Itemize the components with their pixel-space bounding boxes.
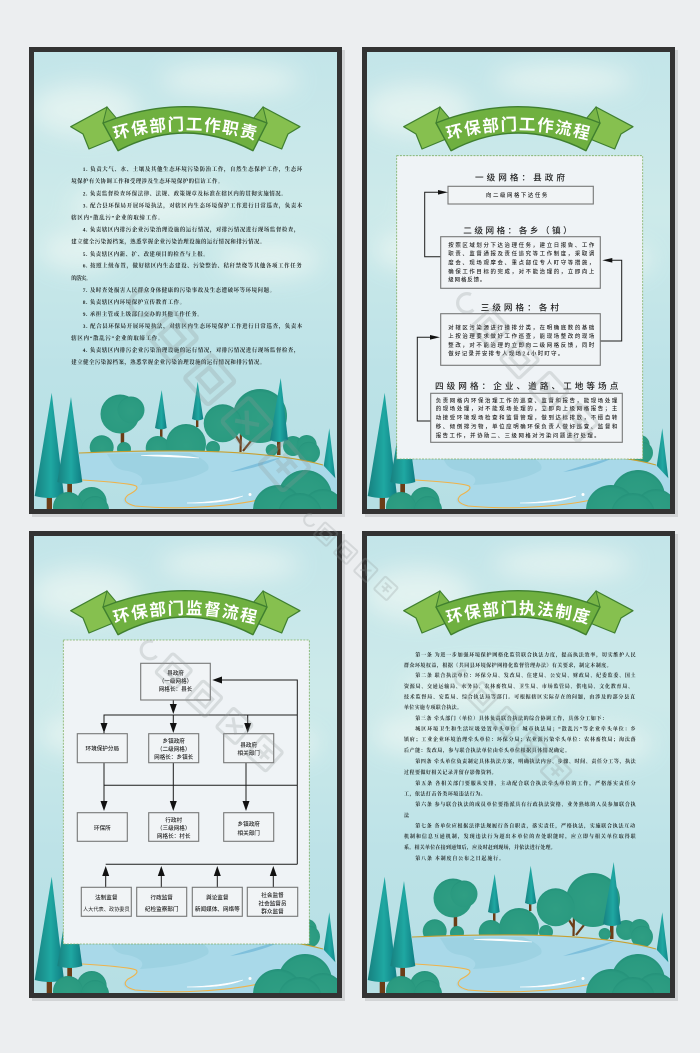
text block: duties list: 辖区内“散乱污”企业的取缔工作。	[71, 214, 163, 222]
banner: supervision process title	[70, 590, 301, 636]
box: public opinion supervision	[192, 887, 242, 916]
poster: enforcement rules	[362, 531, 675, 998]
poster: work process	[362, 47, 675, 514]
box: county departments	[224, 734, 274, 763]
box: level one task: 向二级网格下达任务	[486, 191, 548, 199]
box: level two duties: 按照区域划分下达治理任务，建立日报告、工作	[448, 241, 595, 249]
box: environmental office	[77, 813, 127, 841]
box: level four duties: 动接受环境现场检查和监督管理，做到达标排放，不擅自转	[436, 414, 618, 422]
box: public opinion supervision: 新闻媒体、网络等	[195, 905, 240, 913]
text block: duties list	[71, 165, 303, 367]
box: level two duties: 级网格反馈。	[448, 276, 485, 284]
box: social supervision: 社会监督	[261, 891, 284, 899]
text block: enforcement articles: 第八条 本制度自公布之日起施行。	[415, 855, 504, 862]
text block: duties list: 4. 负责辖区内排污企业污染治理设施的运行情况，对排污情况进行现场监督检查，	[83, 226, 299, 234]
banner: work process title	[403, 106, 634, 152]
heading: level four: 四级网格：企业、道路、工地等场点	[435, 380, 619, 391]
box: administrative village: （三级网格）	[157, 824, 190, 832]
box: administrative village	[149, 813, 199, 841]
box: administrative supervision: 行政监督	[151, 894, 173, 902]
box: level two duties: 确保工作目标的完成，对不能治理的，立即向上	[448, 267, 595, 275]
box: township government	[149, 734, 199, 763]
text block: enforcement articles: 第四条 牵头单位负责制定具体执法方案，明确执法内容、步骤、时间、责任分工等，执法	[415, 758, 637, 766]
banner: work duties title	[70, 106, 301, 152]
heading: level one: 一级网格：县政府	[475, 172, 565, 182]
heading: level two: 二级网格：各乡（镇）	[463, 224, 572, 236]
box: legal supervision: 法制监督	[95, 894, 118, 902]
text block: enforcement articles: 第二条 联合执法单位：环保分局、发改局、住建局、公安局、财政局、纪委监委、国土	[415, 672, 636, 679]
heading: level three: 三级网格：各村	[481, 302, 559, 312]
text block: duties list: 2. 负责监督检查环保法律、法规、政策规章及标准在辖区内的贯彻实施情况。	[83, 190, 287, 198]
text block: enforcement articles: 群众环境权益，根据《共同县环境保护网格化监督管理办法》有关要求，制定本制度。	[404, 662, 612, 670]
box: administrative supervision	[137, 887, 187, 916]
banner: work duties title: 环保部门工作职责	[112, 116, 257, 141]
box: level two duties	[441, 237, 600, 288]
box: level four duties: 的现场处理，对不能现场处理的，立即向上级网格报告；主	[436, 405, 618, 413]
panel: four-level grid	[397, 156, 643, 459]
scene: landscape background	[30, 536, 344, 1021]
box: level three duties: 做好记录并安排专人现场24小时盯守。	[448, 349, 563, 357]
text block: enforcement articles: 资源局、交通运输局、水务局、农林畜牧局、卫生局、市场监管局、供电局、文化教育局、	[404, 683, 633, 690]
box: administrative village: 行政村	[165, 816, 182, 824]
scene: landscape background	[363, 536, 677, 1021]
poster: work duties	[29, 47, 342, 514]
banner: enforcement rules title: 环保部门执法制度	[445, 600, 590, 625]
box: legal supervision: 人大代表、政协委员	[83, 905, 130, 913]
box: environmental office: 环保所	[94, 824, 111, 832]
connectors	[100, 676, 297, 887]
box: legal supervision	[81, 887, 131, 916]
text block: enforcement articles: 工，依法打击各类环境违法行为。	[404, 790, 486, 798]
text block: duties list: 1. 负责大气、水、土壤及其他生态环境污染防治工作，自然生态保护工作，生态环	[83, 165, 303, 174]
box: township departments	[224, 813, 274, 841]
watermarks	[121, 282, 598, 787]
box: level four duties: 报告工作，并协助二、三级网格对污染问题进行处理。	[436, 431, 600, 439]
text block: duties list: 6. 按照上级布置，做好辖区内生态建设、污染整治、秸秆禁烧等其他各项工作任务	[83, 262, 302, 270]
banner: supervision process title: 环保部门监督流程	[112, 600, 257, 624]
text block: enforcement articles: 第六条 参与联合执法的成员单位要指派具有行政执法资格、业务熟练的人员参加联合执	[415, 801, 636, 808]
box: level four duties	[431, 393, 622, 442]
box: social supervision	[247, 887, 298, 916]
arrow: level four to level three	[417, 335, 440, 421]
box: administrative village: 网格长：村长	[157, 832, 191, 840]
arrow: level three to level two	[600, 258, 622, 341]
text block: duties list: 5. 负责辖区内新、扩、改建项目的检查与上报。	[83, 250, 209, 258]
scene: landscape background	[363, 52, 677, 537]
box: county government: 县政府	[167, 669, 184, 677]
text block: duties list: 3. 配合县环保局开展环境执法，对辖区内生态环境保护工作进行日常巡查，负责本	[83, 202, 303, 210]
arrow: level two to level one	[425, 190, 448, 257]
text block: duties list: 的落实。	[71, 274, 91, 282]
text block: enforcement articles: 城区环境卫生和生活垃圾处置牵头单位：城市执法局；“散乱污”等企业牵头单位：乡	[415, 726, 636, 732]
text block: enforcement articles	[404, 652, 637, 862]
box: township government: （二级网格）	[157, 745, 190, 753]
text block: duties list: 境保护有关协调工作和受理涉及生态环境保护的信访工作。	[71, 177, 223, 185]
text block: enforcement articles: 后产能：发改局，参与联合执法单位由牵头单位根据具体情况确定。	[404, 747, 570, 755]
box: social supervision: 群众监督	[261, 908, 284, 916]
text block: duties list: 建立健全污染源档案，熟悉掌握企业污染治理设施的运行情况和排污情况。	[71, 238, 265, 246]
box: level three duties	[441, 314, 600, 365]
text block: duties list: 7. 及时查处损害人民群众身体健康的污染事故及生态遭破坏等环境问题。	[83, 286, 275, 294]
box: level two duties: 职责、监督通报及责任追究等工作制度，采取调	[448, 250, 594, 258]
text block: enforcement articles: 第七条 各单位应根据法律法规履行各自职责，落实责任，严格执法，实施联合执法互动	[415, 822, 635, 830]
text block: enforcement articles: 机制和信息互通机制，发现违法行为超出本单位的查处职能时，应立即与相关单位取得联	[404, 833, 636, 841]
box: township departments: 乡镇政府	[238, 820, 260, 828]
box: county government: 网格长：县长	[159, 685, 193, 693]
poster: supervision process	[29, 531, 342, 998]
scene: landscape background	[30, 52, 344, 537]
text block: duties list: 3. 配合县环保局开展环境执法，对辖区内生态环境保护工作进行日常巡查，负责本	[83, 322, 303, 331]
box: county government	[141, 663, 210, 700]
panel: supervision flowchart	[63, 640, 309, 944]
text block: enforcement articles: 技术监督局、安监局、综合执法局等部门。可根据辖区实际存在的问题，由涉及的部分县直	[404, 694, 635, 702]
text block: enforcement articles: 过程要做好相关记录并留存影像资料。	[404, 769, 497, 776]
box: level three duties: 上按治理要求做好工作巡查，能现场整改的现场	[448, 332, 595, 340]
text block: enforcement articles: 第五条 各相关部门要服从安排，主动配合联合执法牵头单位的工作，严格落实责任分	[415, 780, 636, 788]
box: level four duties: 负责网格内环保治理工作的巡查、监督和报告，能现场处理	[436, 396, 618, 404]
banner: enforcement rules title	[403, 590, 634, 636]
box: level two duties: 度会、现场观摩会、重点部位专人盯守等措施，	[448, 259, 594, 267]
box: environmental sub-bureau	[77, 734, 127, 763]
text block: enforcement articles: 法。	[404, 812, 412, 819]
box: level three duties: 整改，对不能治理的立即向二级网格反馈，同时	[448, 341, 595, 349]
box: county government: （一级网格）	[159, 677, 192, 685]
box: county departments: 相关部门	[238, 749, 260, 757]
box: level three duties: 对辖区污染源进行摸排分类，在明确底数的基础	[448, 323, 595, 331]
text block: duties list: 8. 负责辖区内环境保护宣传教育工作。	[83, 298, 185, 306]
banner: work process title: 环保部门工作流程	[445, 116, 590, 140]
box: township government: 网格长：乡镇长	[154, 753, 194, 761]
box: township departments: 相关部门	[238, 829, 260, 837]
text block: duties list: 9. 承担主管或上级部门交办的其他工作任务。	[83, 310, 203, 318]
box: township government: 乡镇政府	[163, 737, 185, 745]
text block: duties list: 4. 负责辖区内排污企业污染治理设施的运行情况，对排污情况进行现场监督检查，	[83, 346, 299, 355]
box: level four duties: 移、倾倒排污物，单位应明确环保负责人做好巡查、监督和	[436, 423, 617, 431]
box: level one task	[448, 186, 593, 204]
text block: enforcement articles: 第一条 为进一步加强环境保护网格化监管联合执法力度，提高执法效率，切实维护人民	[415, 652, 636, 660]
text block: enforcement articles: 系。相关单位在接到通知后，应及时赶到现场，并依法进行处理。	[404, 844, 556, 852]
text block: enforcement articles: 单位实施专项联合执法。	[404, 704, 462, 711]
box: environmental sub-bureau: 环境保护分局	[86, 744, 119, 752]
box: social supervision: 社会监督员	[259, 899, 287, 907]
text block: enforcement articles: 第三条 牵头部门（单位）具体负责联合执法的综合协调工作，具体分工如下：	[415, 715, 607, 723]
box: public opinion supervision: 舆论监督	[206, 894, 229, 902]
text block: enforcement articles: 镇府；工业企业环境治理牵头单位：环保分局；农业源污染牵头单位：农林畜牧局；淘汰落	[404, 736, 636, 743]
text block: duties list: 建立健全污染源档案，熟悉掌握企业污染治理设施的运行情况和排污情况。	[71, 358, 265, 367]
box: county departments: 县政府	[240, 741, 257, 749]
box: administrative supervision: 纪检监察部门	[145, 905, 179, 913]
text block: duties list: 辖区内“散乱污”企业的取缔工作。	[71, 334, 163, 342]
